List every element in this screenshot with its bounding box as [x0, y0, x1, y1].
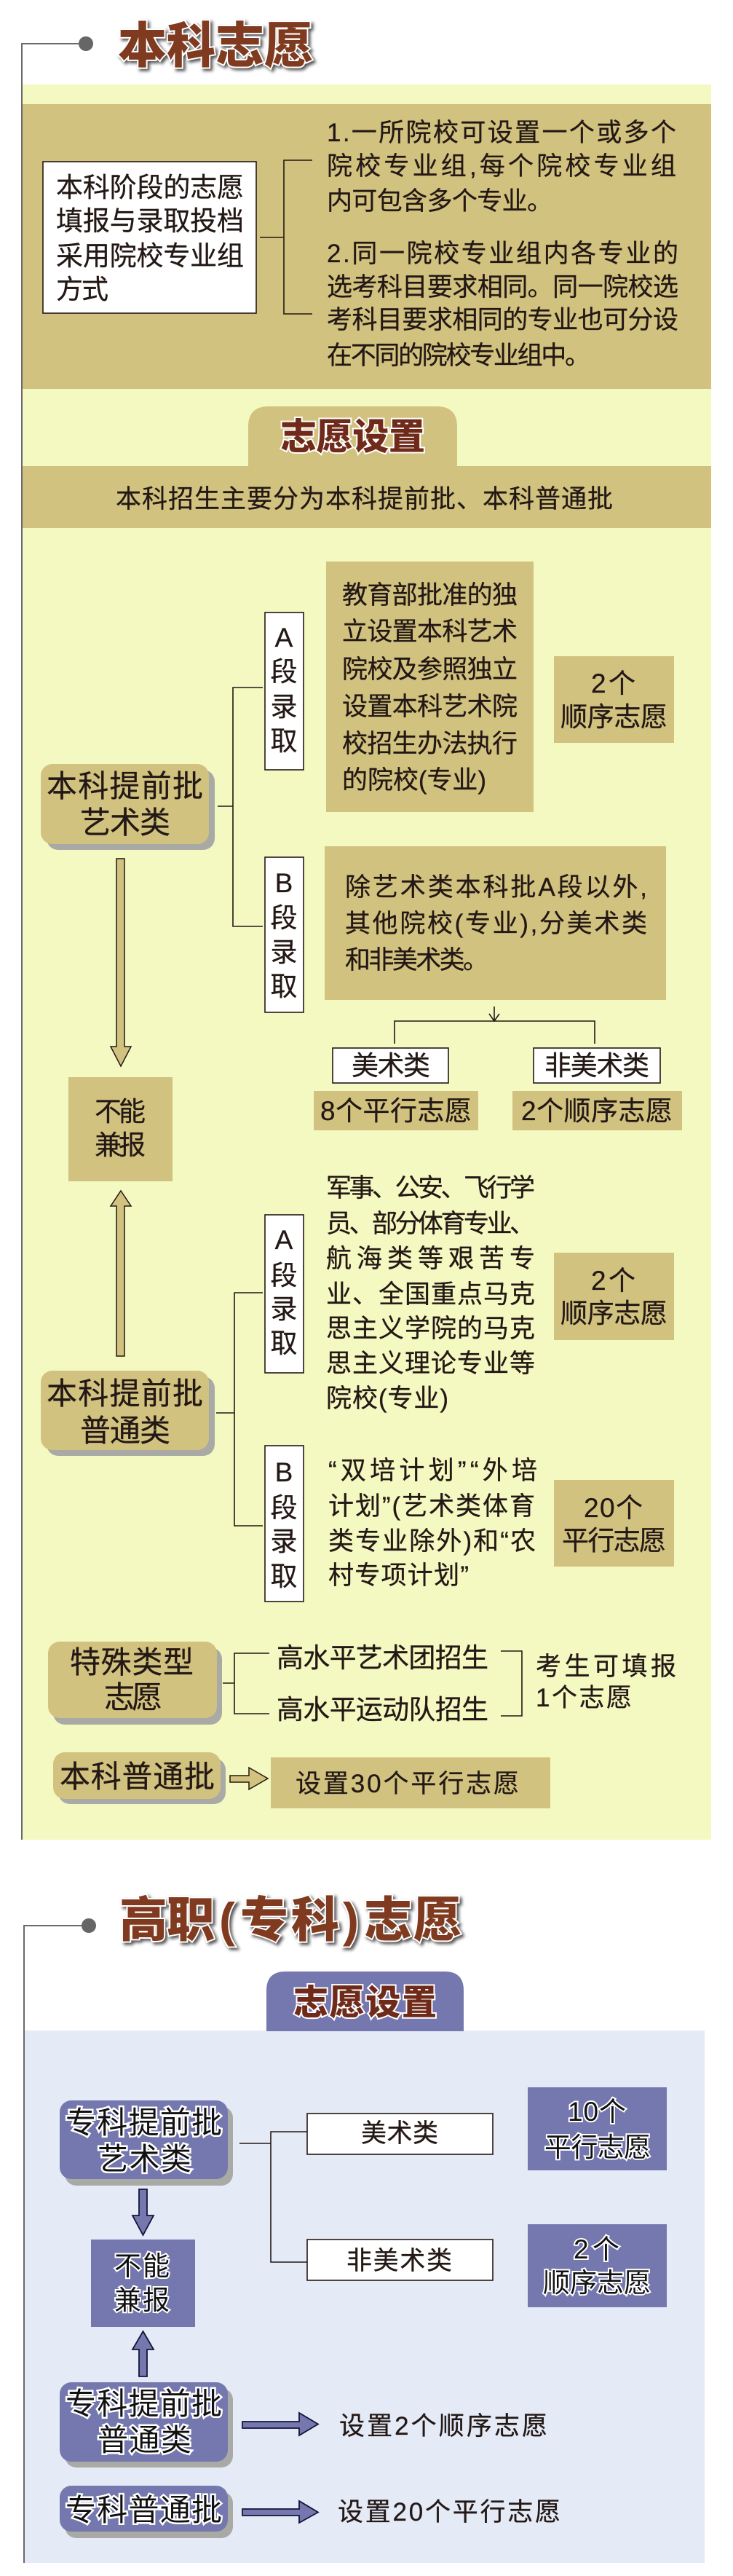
pill: art early batch: [41, 764, 215, 850]
box: general segment B: 段: [271, 1493, 297, 1523]
text block: rule 2: 在不同的院校专业组中。: [327, 342, 590, 370]
pill: vocational regular batch: 专科普通批: [66, 2493, 222, 2527]
box: cannot apply both: 不能: [95, 1097, 146, 1127]
box: cannot apply both: 兼报: [114, 2285, 170, 2315]
callout: general A 2 sequential: 顺序志愿: [560, 1299, 667, 1328]
text block: rule 1: [327, 119, 676, 216]
callout: 20 parallel: 平行志愿: [562, 1526, 666, 1556]
box: general segment B: 取: [271, 1561, 297, 1591]
band: batch summary: [23, 466, 711, 528]
heading tab: vocational settings: 志愿设置: [293, 1984, 437, 2022]
box: general segment B: 录: [271, 1527, 297, 1556]
text block: general segment A scope: 业、全国重点马克: [326, 1280, 535, 1309]
box: art segment A: 录: [271, 692, 297, 722]
heading tab: vocational settings: [266, 1972, 464, 2031]
connector: right bracket: [501, 1651, 522, 1716]
pill: art early batch: 艺术类: [80, 806, 170, 840]
box: general segment A: 取: [271, 1328, 297, 1358]
panel: art segment A scope: 设置本科艺术院: [342, 693, 518, 721]
panel: undergraduate intro band: [23, 104, 711, 389]
pill: vocational general early batch: [60, 2382, 233, 2467]
text block: rule 2: [327, 240, 678, 370]
pill: regular batch: 本科普通批: [60, 1760, 215, 1794]
callout: 8 parallel: [314, 1091, 478, 1130]
panel: art segment A scope: 院校及参照独立: [342, 655, 518, 684]
box: general segment A: A: [275, 1225, 293, 1255]
text box: method: 方式: [56, 275, 108, 304]
text block: one choice: 1个志愿: [536, 1684, 632, 1712]
box: art segment A: 段: [271, 657, 297, 687]
box: non-art category: 非美术类: [346, 2247, 452, 2275]
callout: 8 parallel: 8个平行志愿: [320, 1096, 472, 1126]
callout: art A 2 sequential: 2个: [591, 669, 635, 698]
connector: vocational art: [239, 2132, 307, 2262]
band: batch summary: 本科招生主要分为本科提前批、本科普通批: [116, 485, 613, 513]
text box: method: 采用院校专业组: [56, 241, 244, 271]
panel: undergraduate section background: [23, 84, 711, 1840]
box: art category: 美术类: [361, 2119, 438, 2148]
text block: general segment A scope: 员、部分体育专业、: [326, 1210, 535, 1238]
text box: method: 本科阶段的志愿: [56, 173, 244, 202]
pill: vocational regular batch: [60, 2486, 233, 2538]
panel: art segment B scope: 除艺术类本科批A段以外,: [345, 873, 647, 902]
pill: general early batch: 本科提前批: [47, 1376, 203, 1411]
arrow: vocational regular: [242, 2501, 318, 2523]
panel: art segment A scope: 教育部批准的独: [342, 581, 518, 610]
panel: art segment A scope: 立设置本科艺术: [342, 618, 518, 646]
pill: general early batch: 普通类: [80, 1414, 170, 1448]
box: general segment B: [265, 1446, 304, 1602]
callout: 2 sequential: 顺序志愿: [543, 2268, 651, 2298]
callout: 2 sequential: 2个顺序志愿: [521, 1096, 673, 1126]
box: art segment A: 取: [271, 726, 297, 756]
box: art segment B: 取: [271, 972, 297, 1001]
icon: vocational title dot: [82, 1918, 96, 1933]
heading tab: volunteer settings: 志愿设置: [280, 417, 425, 457]
callout: 10 parallel: 平行志愿: [544, 2132, 651, 2162]
text block: general segment A scope: 军事、公安、飞行学: [326, 1174, 535, 1202]
text box: method: [43, 162, 256, 313]
text block: rule 1: 院校专业组,每个院校专业组: [327, 152, 676, 181]
box: general segment B: B: [275, 1457, 293, 1487]
text: 20 parallel: 设置20个平行志愿: [338, 2498, 560, 2526]
pill: special type: 特殊类型: [70, 1645, 194, 1679]
callout: art A 2 sequential: [554, 656, 674, 743]
text block: general segment A scope: 思主义学院的马克: [326, 1315, 535, 1343]
text box: method: 填报与录取投档: [56, 206, 244, 236]
title: undergraduate: 本科志愿: [118, 19, 313, 74]
connector: general early batch: [216, 1293, 263, 1526]
arrow: art to exclusive: [111, 859, 131, 1066]
text block: rule 2: 选考科目要求相同。同一院校选: [327, 273, 678, 302]
heading tab: volunteer settings: [248, 406, 457, 466]
text block: rule 2: 考科目要求相同的专业也可分设: [327, 306, 678, 334]
panel: vocational background: [25, 2031, 705, 2563]
text block: one choice: [536, 1653, 676, 1712]
callout: general A 2 sequential: [554, 1253, 674, 1340]
box: art category: [307, 2114, 493, 2154]
box: art segment B: 段: [271, 903, 297, 933]
pill: special type: 志愿: [104, 1680, 162, 1714]
box: art segment B: 录: [271, 937, 297, 967]
connector: method bracket: [260, 160, 312, 314]
callout: 20 parallel: 20个: [584, 1493, 643, 1523]
text block: general segment B scope: “双培计划”“外培: [328, 1457, 537, 1485]
pill: art early batch: 本科提前批: [47, 769, 203, 803]
text block: general segment A scope: [326, 1174, 535, 1413]
pill: vocational general early batch: 普通类: [98, 2423, 191, 2457]
arrow: vocational art to exclusive: [132, 2189, 154, 2235]
box: cannot apply both: 兼报: [95, 1130, 146, 1160]
text block: general segment B scope: 村专项计划”: [328, 1561, 469, 1590]
box: art segment A: [265, 613, 304, 770]
pill: vocational art early batch: 艺术类: [98, 2142, 191, 2176]
pill: vocational art early batch: 专科提前批: [66, 2106, 222, 2140]
callout: 30 parallel: 设置30个平行志愿: [296, 1770, 519, 1798]
arrow: split to art types: [395, 1007, 595, 1044]
text block: general segment B scope: 类专业除外)和“农: [328, 1527, 536, 1556]
text: 2 sequential: 设置2个顺序志愿: [339, 2412, 547, 2441]
box: art segment B: [265, 857, 304, 1012]
text: sports team: 高水平运动队招生: [277, 1695, 488, 1725]
connector: special type: [223, 1653, 269, 1714]
text block: general segment A scope: 航海类等艰苦专: [326, 1245, 535, 1273]
text block: rule 1: 1.一所院校可设置一个或多个: [327, 119, 676, 147]
arrow: vocational general to exclusive: [132, 2331, 154, 2376]
text block: rule 1: 内可包含多个专业。: [327, 187, 552, 216]
callout: general A 2 sequential: 2个: [591, 1266, 635, 1296]
box: general segment A: 录: [271, 1294, 297, 1324]
pill: vocational art early batch: [60, 2100, 233, 2186]
text block: rule 2: 2.同一院校专业组内各专业的: [327, 240, 678, 268]
box: general segment A: [265, 1215, 304, 1373]
callout: 2 sequential: [528, 2224, 667, 2307]
pill: regular batch: [53, 1752, 226, 1804]
callout: art A 2 sequential: 顺序志愿: [560, 702, 667, 732]
box: general segment A: 段: [271, 1261, 297, 1291]
callout: 30 parallel: [271, 1757, 550, 1808]
panel: art segment A scope: 校招生办法执行: [342, 730, 518, 758]
box: cannot apply both: [68, 1077, 173, 1181]
panel: art segment B scope: 其他院校(专业),分美术类: [345, 910, 647, 938]
text block: general segment B scope: [328, 1457, 537, 1590]
box: art segment B: B: [275, 868, 293, 898]
callout: 10 parallel: 10个: [568, 2097, 626, 2127]
callout: 2 sequential: [512, 1091, 682, 1130]
callout: 10 parallel: [528, 2087, 667, 2170]
text: art troupe: 高水平艺术团招生: [277, 1643, 488, 1673]
title: vocational: 高职(专科)志愿: [119, 1893, 461, 1947]
arrow: regular batch: [230, 1768, 268, 1789]
arrow: vocational general: [242, 2413, 318, 2435]
text block: general segment A scope: 思主义理论专业等: [326, 1350, 535, 1378]
arrow: general to exclusive: [111, 1191, 131, 1356]
pill: vocational general early batch: 专科提前批: [66, 2387, 222, 2421]
panel: art segment A scope: 的院校(专业): [342, 766, 486, 795]
box: art category: [333, 1048, 448, 1083]
callout: 20 parallel: [554, 1480, 674, 1567]
text block: general segment A scope: 院校(专业): [326, 1384, 448, 1413]
panel: art segment B scope: [325, 846, 666, 1000]
box: non-art category: [307, 2240, 493, 2280]
box: art category: 美术类: [352, 1051, 430, 1081]
box: art segment A: A: [275, 623, 293, 653]
box: non-art category: 非美术类: [544, 1051, 649, 1081]
icon: title dot: [79, 36, 93, 51]
box: cannot apply both: 不能: [114, 2251, 170, 2281]
pill: general early batch: [41, 1371, 215, 1456]
box: cannot apply both: [91, 2240, 195, 2327]
panel: art segment A scope: [326, 562, 534, 812]
text block: general segment B scope: 计划”(艺术类体育: [328, 1492, 535, 1521]
callout: 2 sequential: 2个: [574, 2234, 619, 2264]
connector: art early batch: [218, 688, 263, 926]
pill: special type: [48, 1642, 222, 1725]
panel: art segment B scope: 和非美术类。: [345, 946, 488, 974]
text block: one choice: 考生可填报: [536, 1653, 676, 1681]
